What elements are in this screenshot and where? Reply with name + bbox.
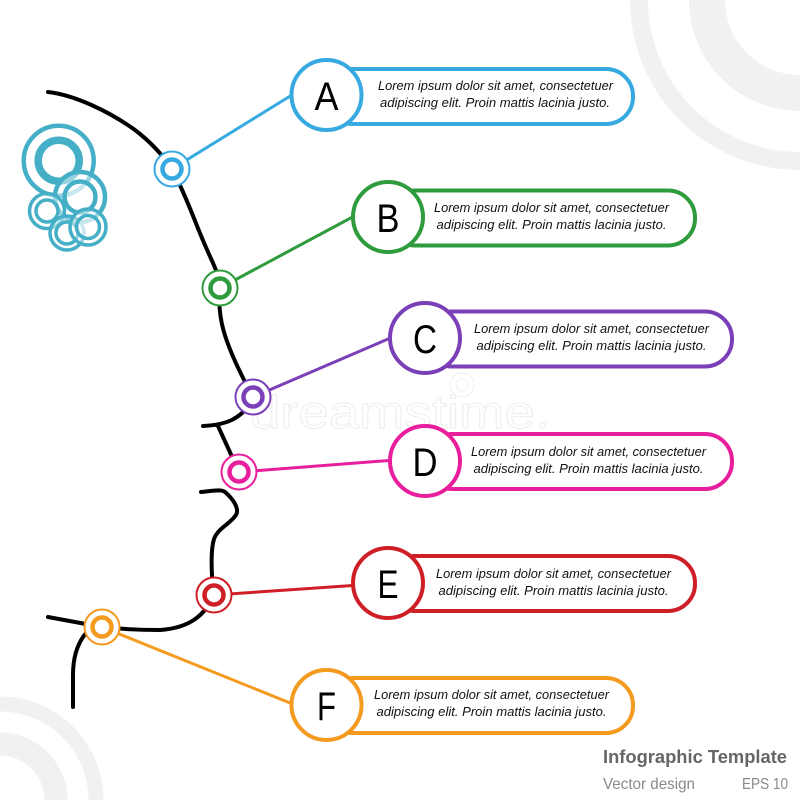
callout A [292, 60, 633, 130]
callout D: Lorem ipsum dolor sit amet, consectetuer [471, 445, 707, 459]
callout E [353, 548, 695, 618]
connector D [239, 460, 395, 472]
callout B [353, 182, 695, 252]
watermark: dreamstime. [250, 386, 550, 438]
callout B: adipiscing elit. Proin mattis lacinia justo. [436, 218, 666, 232]
node F [84, 610, 120, 644]
callout D [390, 426, 732, 496]
footer subtitle: Vector design [603, 776, 695, 793]
callout A: A [314, 75, 339, 119]
background rings: bottom left [0, 704, 96, 800]
connector B [220, 213, 360, 288]
callout D: adipiscing elit. Proin mattis lacinia justo. [474, 462, 704, 476]
node C [236, 380, 270, 414]
callout E: adipiscing elit. Proin mattis lacinia justo. [438, 584, 668, 598]
callout C [390, 303, 732, 373]
callout C: adipiscing elit. Proin mattis lacinia justo. [476, 339, 706, 353]
callout F: F [317, 685, 336, 729]
connector C [253, 336, 395, 397]
watermark [250, 373, 550, 438]
footer format label: EPS 10 [742, 776, 788, 793]
callout B: Lorem ipsum dolor sit amet, consectetuer [434, 201, 670, 215]
callout F: Lorem ipsum dolor sit amet, consectetuer [374, 688, 610, 702]
callout A: adipiscing elit. Proin mattis lacinia justo. [380, 96, 610, 110]
callout F [292, 670, 633, 740]
connector E [214, 585, 360, 595]
footer title: Infographic Template [603, 747, 787, 767]
node E [196, 578, 232, 612]
callout B: B [376, 197, 400, 241]
node B [202, 270, 238, 306]
node A [154, 152, 190, 186]
black branching line [48, 92, 253, 707]
callout A: Lorem ipsum dolor sit amet, consectetuer [378, 79, 614, 93]
node D [222, 454, 256, 490]
connector A [172, 90, 300, 169]
callout C: Lorem ipsum dolor sit amet, consectetuer [474, 322, 710, 336]
callout F: adipiscing elit. Proin mattis lacinia justo. [376, 705, 606, 719]
icon: teal ring cluster [24, 126, 106, 250]
connector F [102, 627, 300, 707]
callout C: C [413, 318, 437, 362]
callout E: Lorem ipsum dolor sit amet, consectetuer [436, 567, 672, 581]
callout D: D [412, 441, 438, 485]
callout E: E [378, 563, 398, 607]
background rings: top right [639, 0, 800, 161]
